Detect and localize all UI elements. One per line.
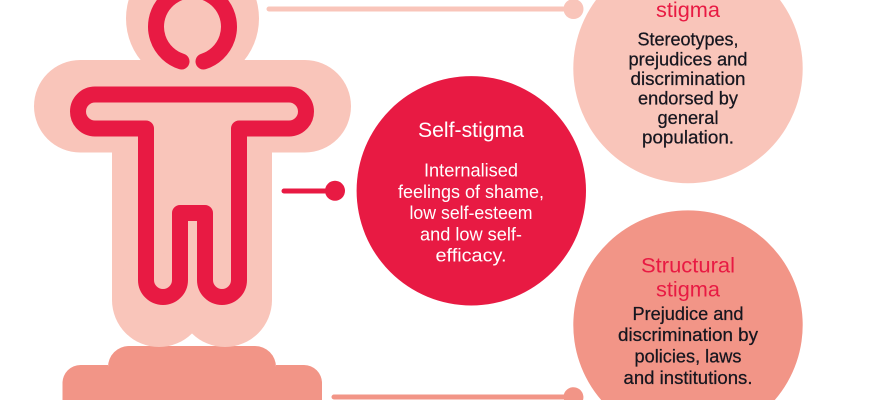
heading: structural stigma	[641, 254, 735, 302]
text: structural stigma description: Prejudice and	[632, 304, 744, 324]
figure body outline	[78, 94, 306, 297]
figure: person on pedestal	[34, 0, 351, 400]
text: structural stigma description: and institutions.	[624, 368, 752, 388]
text: self-stigma description: Internalised	[424, 160, 518, 180]
text: social stigma description: Stereotypes,	[638, 30, 738, 50]
text: self-stigma description: low self-esteem	[410, 203, 532, 223]
connector: social stigma	[269, 0, 584, 19]
panel: social stigma	[573, 0, 803, 183]
connector: structural stigma	[332, 387, 583, 400]
pedestal	[62, 346, 322, 400]
text: social stigma description: discrimination	[630, 69, 746, 89]
heading: structural stigma: Structural	[641, 254, 735, 278]
figure body silhouette	[34, 0, 351, 347]
text: self-stigma description: and low self-	[420, 224, 522, 244]
text: self-stigma description: feelings of shame,	[398, 182, 544, 202]
text: self-stigma description: efficacy.	[436, 246, 506, 266]
text: social stigma description: prejudices and	[628, 50, 748, 70]
text: structural stigma description	[618, 304, 758, 388]
text: social stigma description: endorsed by	[638, 88, 738, 108]
heading: self-stigma: Self-stigma	[418, 119, 524, 142]
text: social stigma description	[628, 30, 748, 148]
figure head outline	[156, 0, 229, 62]
text: self-stigma description	[398, 160, 544, 266]
text: structural stigma description: policies, laws	[634, 346, 742, 366]
text: structural stigma description: discrimination by	[618, 325, 758, 345]
text: social stigma description: general	[658, 108, 718, 128]
panel: structural stigma	[573, 210, 803, 400]
heading: structural stigma: stigma	[656, 278, 720, 302]
connector: self-stigma	[284, 181, 345, 201]
panel: self-stigma	[357, 76, 586, 306]
text: social stigma description: population.	[642, 128, 734, 148]
